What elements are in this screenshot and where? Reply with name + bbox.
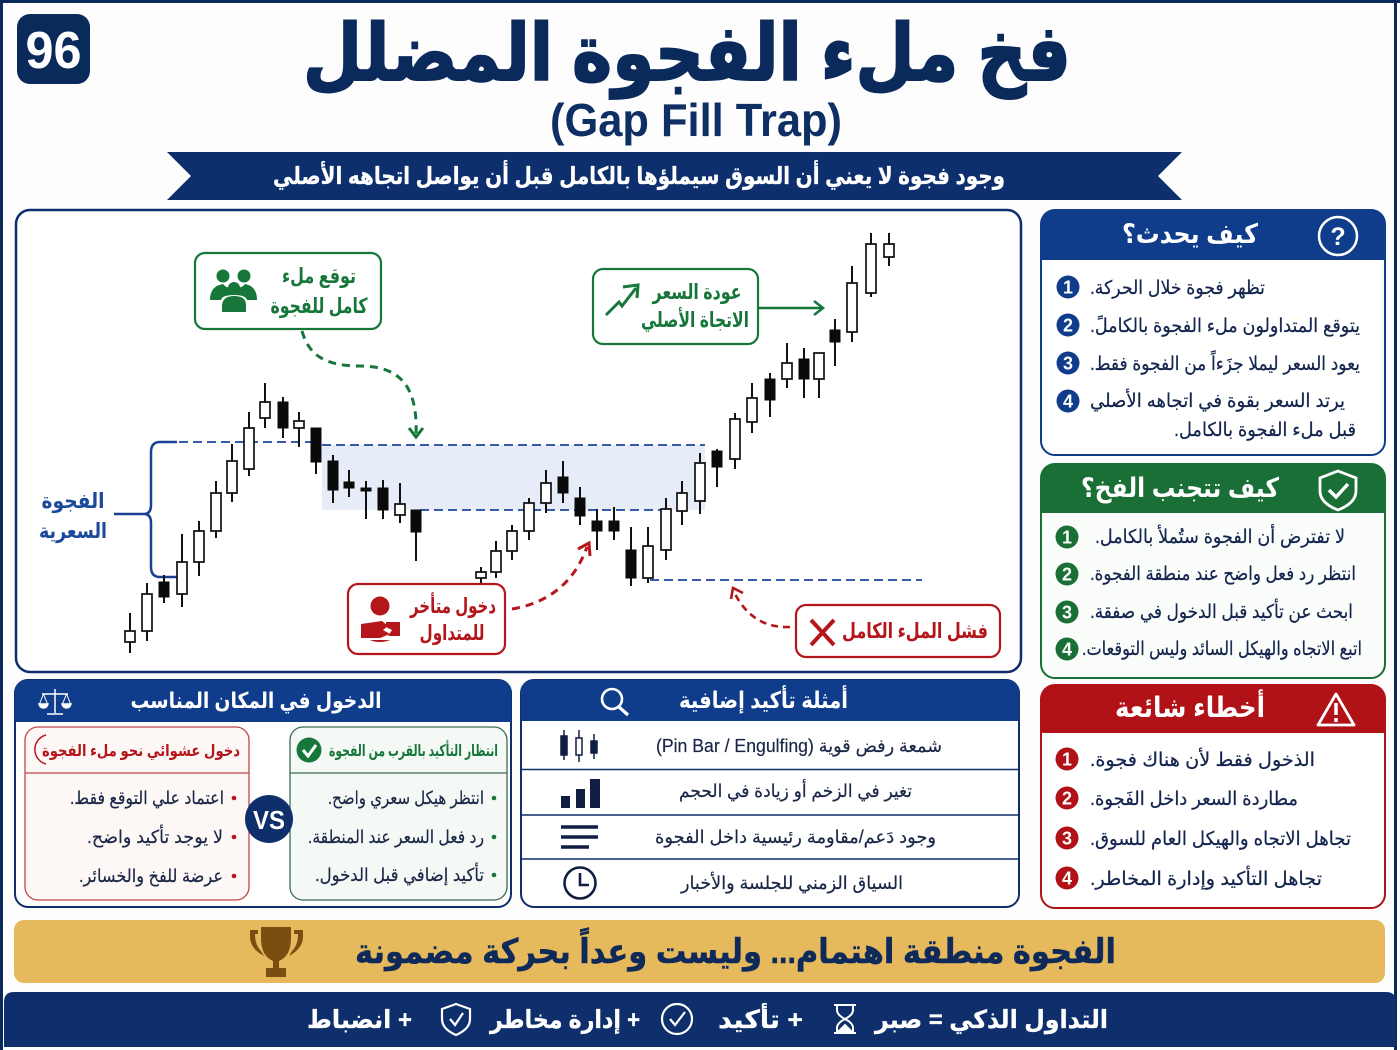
term: risk management: + إدارة مخاطر [488,1006,640,1035]
icon: bars [561,779,600,808]
card: confirmation: تأكيد إضافي قبل الدخول. [315,862,484,886]
icon: clock [564,868,596,898]
gap bounds dashed lines [165,442,922,580]
heading: الدخول في المكان المناسب [130,688,382,714]
icon: people [210,270,257,312]
row: support and resistance: وجود دَعم/مقاومة رئيسية داخل الفجوة [655,827,936,848]
icon: x mark [811,620,834,645]
callout: expected full fill: توقع ملء [282,265,356,288]
gap label: الفجوة [42,490,104,513]
step 2: 2 [1062,788,1072,808]
panel: how to avoid the trap [1041,464,1385,678]
subtitle: (Gap Fill Trap) [550,94,842,146]
callout: late entry: للمتداول [420,622,484,645]
icon: shield check [442,1004,470,1035]
icon: trophy [250,927,303,977]
panel: extra confirmation examples [521,680,1019,907]
vs badge: VS [253,805,285,835]
row: momentum and volume [561,779,912,808]
step 4: 4 [1062,868,1072,888]
vs badge [245,795,293,843]
step 1 [1056,524,1345,548]
card: confirmation: انتظار التأكيد بالقرب من الفجوة [329,740,498,760]
candlesticks [125,233,894,653]
icon: magnifier [602,689,628,715]
step 4: 4 [1063,392,1073,412]
step 2: انتظر رد فعل واضح عند منطقة الفجوة. [1090,564,1356,585]
term: discipline: + انضباط [307,1006,412,1034]
panel: common mistakes [1041,685,1385,908]
callout: price returns to original direction: الاتجاة الأصلي [641,306,749,332]
row: rejection candle [561,730,942,762]
step 3: يعود السعر ليملا جزَءاً من الفجوة فقط. [1090,350,1360,375]
gold banner [14,920,1385,983]
callout: expected full fill [195,253,381,329]
card: random entry: عرضة للفخ والخسائر. [79,866,223,887]
step 4 [1056,865,1322,891]
icon: warning [1318,694,1354,725]
header [1041,464,1385,513]
step 4: قبل ملء الفجوة بالكامل. [1174,420,1356,441]
card: confirmation: انتظر هيكل سعري واضح. [328,788,484,809]
gap label [39,490,107,543]
ribbon banner [167,152,1182,200]
heading: كيف تتجنب الفخ؟ [1081,473,1279,504]
icon: lines [561,827,598,847]
title: فخ ملء الفجوة المضلل [303,9,1071,99]
header [521,680,1019,721]
step 3: تجاهل الاتجاه والهيكل العام للسوق. [1090,829,1351,850]
heading: أخطاء شائعة [1115,689,1265,723]
callout: late entry [348,584,505,654]
step 2: يتوقع المتداولون ملء الفجوة بالكاملً. [1090,315,1360,337]
card: random entry: اعتماد علي التوقع فقط. [70,788,224,809]
step 4: يرتد السعر بقوة في اتجاهه الأصلي [1090,389,1345,412]
step 1: تظهر فجوة خلال الحركة. [1090,278,1265,299]
step 1: 1 [1062,528,1072,548]
step 1: 1 [1063,278,1073,298]
step 1 [1056,276,1265,299]
callout: expected full fill: كامل للفجوة [270,295,368,318]
callout: price returns to original direction: عودة السعر [652,281,742,304]
step 4 [1056,389,1356,441]
card: random entry: دخول عشوائي نحو ملء الفجوة [42,743,240,761]
header [15,680,511,722]
dashed arrow: fail to low [731,588,790,627]
panel: entering at the right place [15,680,511,907]
row: momentum and volume: تغير في الزخم أو زيادة في الحجم [679,779,912,802]
card: random entry: لا يوجد تأكيد واضح. [87,824,223,848]
step 1: 1 [1062,750,1072,770]
row: session context [564,868,903,898]
step 3: ابحث عن تأكيد قبل الدخول في صفقة. [1090,598,1353,623]
callout: full fill fails: فشل الملء الكامل [842,620,988,643]
heading: كيف يحدث؟ [1122,219,1258,249]
step 3: 3 [1062,828,1072,848]
gold banner: الفجوة منطقة اهتمام... وليست وعداً بحركة مضمونة [355,927,1116,972]
icon: question [1319,217,1357,255]
dashed arrow: expectation to gap [302,331,423,437]
panel: how it happens [1041,210,1385,455]
card: confirmation [290,727,507,900]
gap zone [322,445,705,510]
callout: full fill fails [796,605,1000,657]
check icon [296,738,322,762]
icon: question: ? [1330,223,1346,251]
heading: أمثلة تأكيد إضافية [679,684,848,714]
badge: number 96: 96 [26,22,82,80]
dashed arrow: late entry [512,543,590,609]
panel: chart [16,210,1021,672]
step 3: 3 [1062,602,1072,622]
row: rejection candle: شمعة رفض قوية (Pin Bar / Engulfing) [656,736,942,757]
step 1: الذخول فقط لأن هناك فجوة. [1090,748,1315,771]
header [1041,685,1385,733]
icon: hourglass [834,1005,856,1033]
icon: candles [561,730,597,762]
row: session context: السياق الزمني للجلسة والأخبار [680,872,903,894]
callout: late entry: دخول متأخر [409,591,496,618]
term: confirmation: + تأكيد [718,1003,803,1034]
icon: shield [1320,471,1356,510]
step 3 [1056,598,1353,624]
step 1: لا تفترض أن الفجوة ستُملأ بالكامل. [1095,524,1345,548]
gap label: السعرية [39,520,107,543]
step 2: 2 [1063,316,1073,336]
card: confirmation: رد فعل السعر عند المنطقة. [308,827,484,848]
icon: check circle [662,1004,692,1034]
formula start: التداول الذكي = صبر [873,1006,1108,1035]
step 3: 3 [1063,354,1073,374]
callout: price returns to original direction [593,269,758,344]
ribbon banner: وجود فجوة لا يعني أن السوق سيملؤها بالكامل قبل أن يواصل اتجاهه الأصلي [273,160,1005,190]
step 2: 2 [1062,564,1072,584]
icon: scales [39,689,71,714]
gap bracket [114,442,177,577]
icon: trend arrow [606,285,638,315]
icon: trader [361,596,400,642]
badge: number 96 [17,14,90,84]
step 4: 4 [1062,640,1072,660]
step 2: مطاردة السعر داخل الفَجوة. [1090,789,1298,810]
card: random entry [25,727,249,900]
step 4: تجاهل التأكيد وإدارة المخاطر. [1090,865,1322,891]
footer bar [4,992,1396,1047]
step 3 [1056,350,1360,375]
header [1041,210,1385,260]
arrow: to continuation [758,301,823,315]
